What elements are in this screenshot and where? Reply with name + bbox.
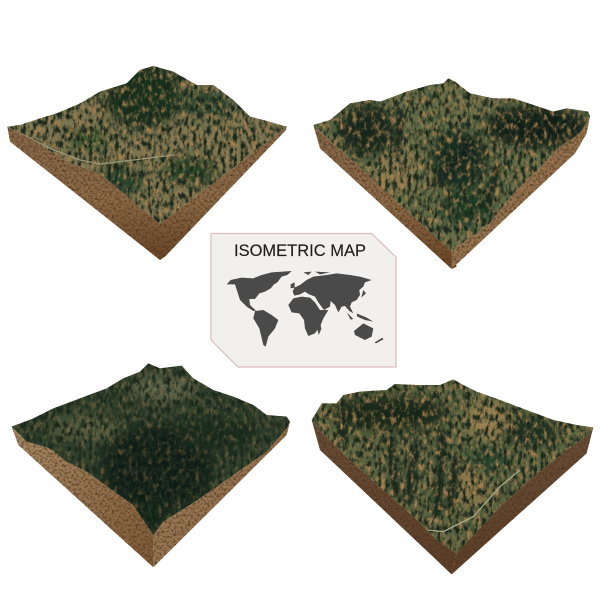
South America <box>253 310 278 347</box>
card background <box>211 234 396 367</box>
terrain surface <box>312 379 594 554</box>
terrain surface <box>8 66 286 224</box>
islands <box>291 272 383 343</box>
North America <box>227 271 292 311</box>
Eurasia <box>293 273 372 313</box>
right soil side <box>160 127 287 260</box>
terrain block: top left <box>7 66 287 260</box>
Africa <box>288 297 328 336</box>
left soil side <box>12 427 153 567</box>
left soil side <box>313 125 457 269</box>
title: ISOMETRIC MAP <box>234 242 366 260</box>
left soil side <box>312 420 457 574</box>
card: isometric map <box>211 234 396 367</box>
world map <box>227 271 383 347</box>
right soil side <box>153 422 290 567</box>
left soil side <box>7 127 160 260</box>
terrain surface <box>12 363 290 535</box>
terrain block: bottom right <box>312 379 594 574</box>
terrain block: top right <box>313 78 590 269</box>
right soil side <box>452 117 590 269</box>
Australia <box>354 323 373 340</box>
terrain block: bottom left <box>12 363 290 568</box>
right soil side <box>452 427 593 574</box>
terrain surface <box>314 78 590 252</box>
